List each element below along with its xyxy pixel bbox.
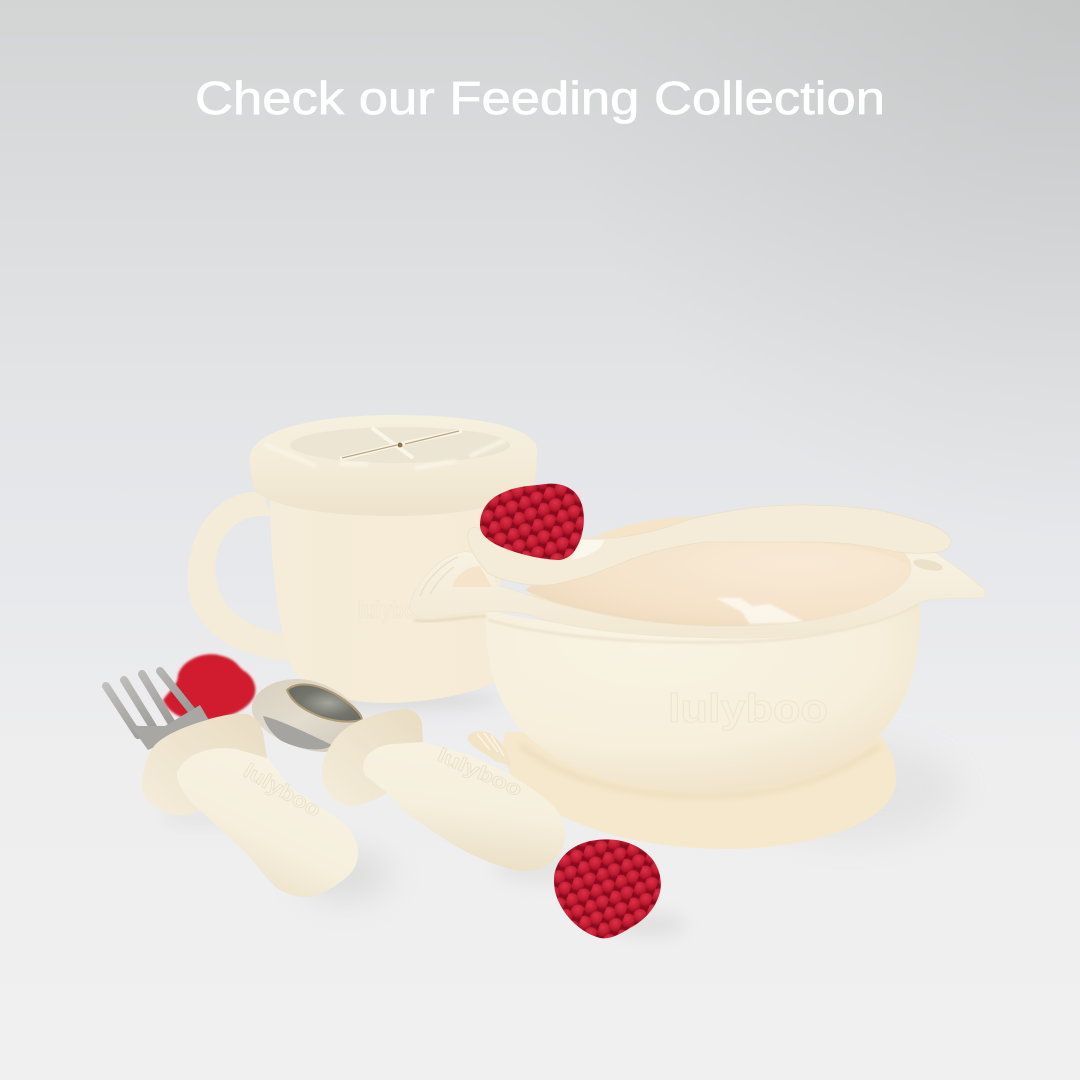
bowl interior reflection: [716, 598, 805, 624]
spoon handle: [322, 709, 565, 871]
left handle shadow on cup: [414, 616, 486, 621]
bowl logo: lulyboo: [668, 687, 828, 731]
lid top: [264, 427, 510, 468]
fork base: [130, 705, 210, 750]
spoon logo: lulyboo: [434, 744, 525, 801]
bowl interior: [525, 542, 911, 632]
right handle hole: [912, 557, 944, 573]
fork handle: [142, 714, 358, 897]
soft shadows: [160, 690, 960, 937]
fork tines: [106, 671, 196, 735]
bowl tab: [467, 731, 511, 766]
raspberry behind fork: [163, 654, 255, 720]
cup logo: lulyboo: [358, 597, 428, 624]
snack cup: [188, 415, 537, 703]
spoon lower reflection: [263, 716, 332, 749]
spoon bowl highlight: [572, 540, 605, 560]
raspberry on spoon: [480, 484, 584, 560]
cup handle: [188, 492, 290, 661]
fork logo: lulyboo: [240, 759, 325, 822]
left handle rings: [420, 557, 458, 596]
bowl body: [486, 596, 920, 792]
bowl rim and handles: [410, 550, 985, 638]
cup body: [270, 500, 500, 703]
suction base: [503, 732, 896, 849]
front raspberry: [554, 839, 661, 938]
small spoon: [252, 679, 565, 871]
bowl spoon: [468, 505, 951, 585]
spoon flange: [322, 709, 423, 806]
rim shadow on body: [488, 604, 918, 642]
left handle hole: [452, 566, 492, 587]
spoon head: [252, 679, 363, 752]
bowl back rim: [530, 517, 925, 620]
title: Check our Feeding Collection: [195, 72, 885, 124]
fork flange: [142, 714, 267, 815]
bowl: [410, 517, 985, 796]
bowl shadow on base: [520, 745, 880, 796]
fork: [106, 671, 358, 897]
spoon reflection: [287, 684, 362, 722]
cup lid: [250, 415, 537, 516]
